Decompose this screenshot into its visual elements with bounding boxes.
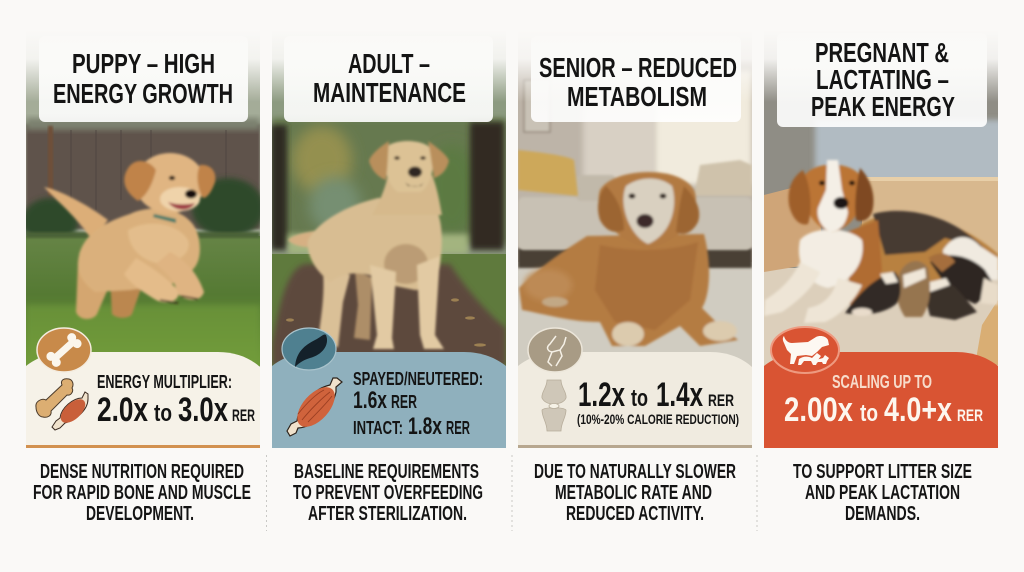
stat: 2.0x to 3.0x RER [97, 372, 255, 429]
icon: joint bones [542, 380, 566, 431]
stat: 2.00x to 4.0+x RER: RER [957, 406, 983, 425]
description: puppy: DENSE NUTRITION REQUIRED [40, 461, 244, 483]
fade behind heading [764, 30, 998, 102]
stat: 2.0x to 3.0x RER: RER [232, 406, 255, 425]
stat: 2.00x to 4.0+x RER: 2.00x [784, 391, 853, 429]
stat: 2.00x to 4.0+x RER: to [860, 400, 878, 427]
heading: puppy [39, 36, 248, 122]
heading: pregnant and lactating [777, 33, 987, 127]
description: puppy: DEVELOPMENT. [86, 503, 194, 525]
heading: senior: SENIOR – REDUCED [539, 52, 737, 83]
heading: adult [284, 36, 493, 122]
heading: adult: MAINTENANCE [313, 77, 466, 108]
description: pregnant and lactating [793, 461, 972, 525]
stat: 1.6x and 1.8x RER: RER [391, 392, 417, 412]
icon: knee joint badge [528, 328, 582, 372]
icon: dog family badge [771, 327, 839, 373]
description: adult [293, 461, 483, 525]
stat: 1.6x and 1.8x RER [353, 369, 483, 440]
icon: bone badge [37, 328, 91, 372]
card: 1.2x to 1.4x multiplier [518, 328, 752, 448]
description: senior: DUE TO NATURALLY SLOWER [534, 461, 736, 483]
stat: 1.6x and 1.8x RER: RER [446, 418, 470, 438]
icon: muscle [287, 378, 342, 436]
dog: yellow labrador [288, 141, 449, 349]
description: senior [534, 461, 736, 525]
panel: adult [271, 30, 506, 525]
fade behind heading [26, 30, 260, 102]
panel: pregnant and lactating [764, 30, 1005, 525]
dog: senior golden retriever [519, 172, 738, 346]
card: scaling up to 4.0+x [764, 327, 998, 448]
fade behind heading [518, 30, 752, 102]
heading: adult: ADULT – [348, 48, 430, 79]
description: puppy [33, 461, 251, 525]
description: adult: TO PREVENT OVERFEEDING [293, 482, 483, 504]
card: spayed and intact multipliers [272, 328, 506, 448]
dog: beagle mother [764, 160, 998, 323]
stat: 1.2x to 1.4x RER [577, 376, 739, 427]
photo: senior golden retriever in a living room [518, 30, 752, 370]
photo: beagle nursing puppies in a whelping box [764, 56, 998, 366]
stat: 1.2x to 1.4x RER: to [631, 385, 648, 412]
panel: senior [518, 30, 752, 525]
stat: 1.6x and 1.8x RER: 1.6x [353, 387, 387, 414]
stat: 1.6x and 1.8x RER: 1.8x [408, 413, 442, 440]
stat: 2.0x to 3.0x RER: 3.0x [178, 391, 228, 429]
description: pregnant and lactating: AND PEAK LACTATION [805, 482, 960, 504]
description: adult: BASELINE REQUIREMENTS [294, 461, 479, 483]
photo: puppy running in a garden [26, 59, 260, 367]
photo: labrador in a park [271, 30, 506, 370]
stat: 2.00x to 4.0+x RER [784, 372, 983, 429]
stat: 1.2x to 1.4x RER: (10%-20% CALORIE REDUCTION) [577, 411, 739, 427]
stat: 1.6x and 1.8x RER: INTACT: [353, 418, 403, 438]
heading: pregnant and lactating: PEAK ENERGY [811, 91, 955, 122]
description: puppy: FOR RAPID BONE AND MUSCLE [33, 482, 251, 504]
icon: bone and muscle [36, 379, 89, 430]
heading: pregnant and lactating: PREGNANT & [815, 37, 949, 68]
stat: 2.0x to 3.0x RER: 2.0x [97, 391, 148, 429]
dog: nursing puppies [845, 253, 998, 320]
fade behind heading [272, 30, 506, 102]
description: adult: AFTER STERILIZATION. [308, 503, 467, 525]
dog: golden retriever puppy [44, 153, 215, 319]
heading: senior: METABOLISM [567, 81, 707, 112]
stat: 2.0x to 3.0x RER: to [154, 400, 172, 427]
stat: 1.2x to 1.4x RER: 1.2x [578, 376, 625, 414]
description: senior: REDUCED ACTIVITY. [566, 503, 704, 525]
card: energy multiplier [26, 328, 260, 448]
description: senior: METABOLIC RATE AND [555, 482, 712, 504]
stat: 1.6x and 1.8x RER: SPAYED/NEUTERED: [353, 369, 483, 389]
stat: 1.2x to 1.4x RER: 1.4x [656, 376, 703, 414]
stat: 2.00x to 4.0+x RER: SCALING UP TO [832, 372, 932, 392]
description: pregnant and lactating: DEMANDS. [845, 503, 920, 525]
stat: 2.00x to 4.0+x RER: 4.0+x [884, 391, 952, 429]
panel: puppy [22, 30, 264, 525]
heading: puppy: ENERGY GROWTH [53, 78, 233, 109]
stat: 2.0x to 3.0x RER: ENERGY MULTIPLIER: [97, 372, 232, 392]
heading: puppy: PUPPY – HIGH [72, 48, 215, 79]
icon: dark muscle badge [282, 328, 336, 370]
heading: senior [531, 36, 741, 122]
stat: 1.2x to 1.4x RER: RER [708, 391, 734, 410]
heading: pregnant and lactating: LACTATING – [816, 64, 949, 95]
